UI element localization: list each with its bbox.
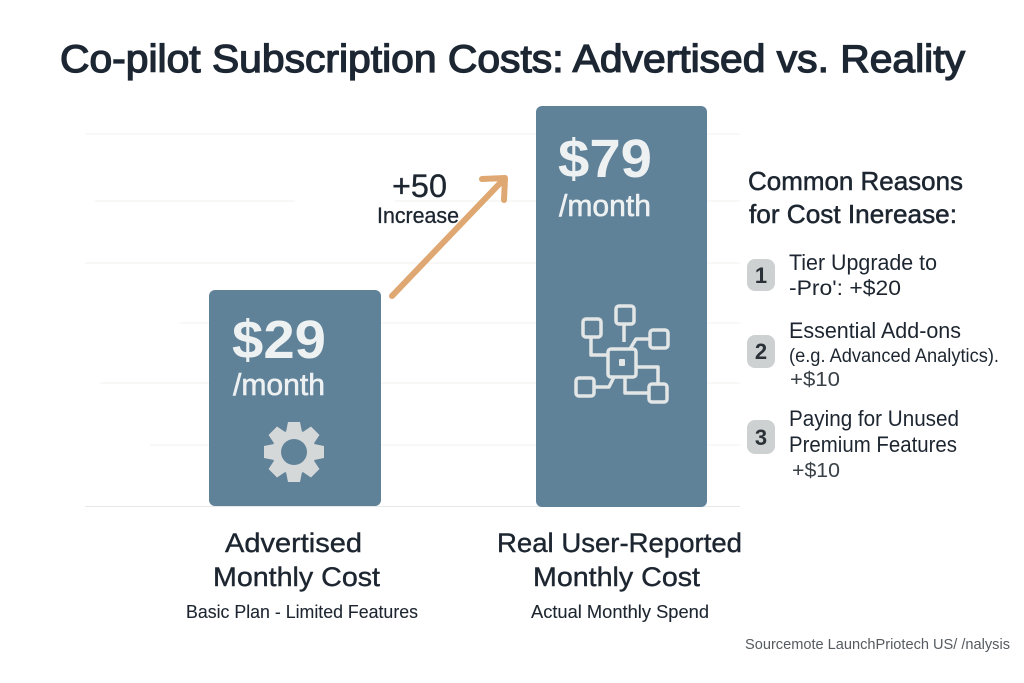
source note: Sourcemote LaunchPriotech US/ /nalysis — [745, 636, 1010, 653]
callout: +50 increase: Increase — [377, 203, 459, 228]
reason 3: 3 — [755, 425, 767, 450]
callout: +50 increase — [377, 168, 459, 228]
reason 3: Premium Features — [789, 432, 957, 457]
heading: common reasons — [748, 166, 963, 229]
arrow: increase — [392, 178, 505, 296]
label: advertised monthly cost: Monthly Cost — [213, 562, 381, 592]
heading: common reasons: for Cost Inerease: — [749, 199, 957, 229]
reason 2: (e.g. Advanced Analytics). — [789, 346, 999, 367]
label: advertised monthly cost — [186, 528, 418, 622]
reason 3 — [747, 406, 959, 482]
unit: per month: /month — [233, 367, 325, 402]
reason 1: Tier Upgrade to — [789, 250, 937, 275]
bar: advertised cost — [209, 290, 381, 506]
icon: network nodes — [576, 306, 668, 402]
price: $79: $79 — [558, 129, 652, 189]
title: Co-pilot Subscription Costs: Advertised vs. Reality — [60, 38, 966, 81]
reason 3: +$10 — [792, 460, 840, 482]
reason 2: Essential Add-ons — [789, 318, 961, 343]
reason 1 — [747, 250, 937, 300]
label: advertised monthly cost: Advertised — [225, 528, 362, 558]
reason 2 — [747, 318, 999, 391]
label: real user-reported monthly cost — [497, 528, 742, 622]
label: real user-reported monthly cost: Monthly Cost — [533, 562, 701, 592]
reason 2: +$10 — [790, 369, 840, 391]
unit: per month: /month — [559, 188, 651, 223]
label: advertised monthly cost: Basic Plan - Limited Features — [186, 602, 418, 622]
heading: common reasons: Common Reasons — [748, 166, 963, 196]
label: real user-reported monthly cost: Actual Monthly Spend — [531, 602, 709, 622]
reason 1: 1 — [755, 263, 767, 288]
reason 1: -Pro': +$20 — [789, 277, 901, 300]
callout: +50 increase: +50 — [392, 168, 447, 204]
price: $29: $29 — [232, 310, 326, 370]
reason 2: 2 — [755, 339, 767, 364]
icon: gear — [264, 422, 324, 482]
label: real user-reported monthly cost: Real User-Reported — [497, 528, 742, 558]
bar: real user-reported cost — [536, 106, 707, 507]
reason 3: Paying for Unused — [789, 406, 959, 431]
